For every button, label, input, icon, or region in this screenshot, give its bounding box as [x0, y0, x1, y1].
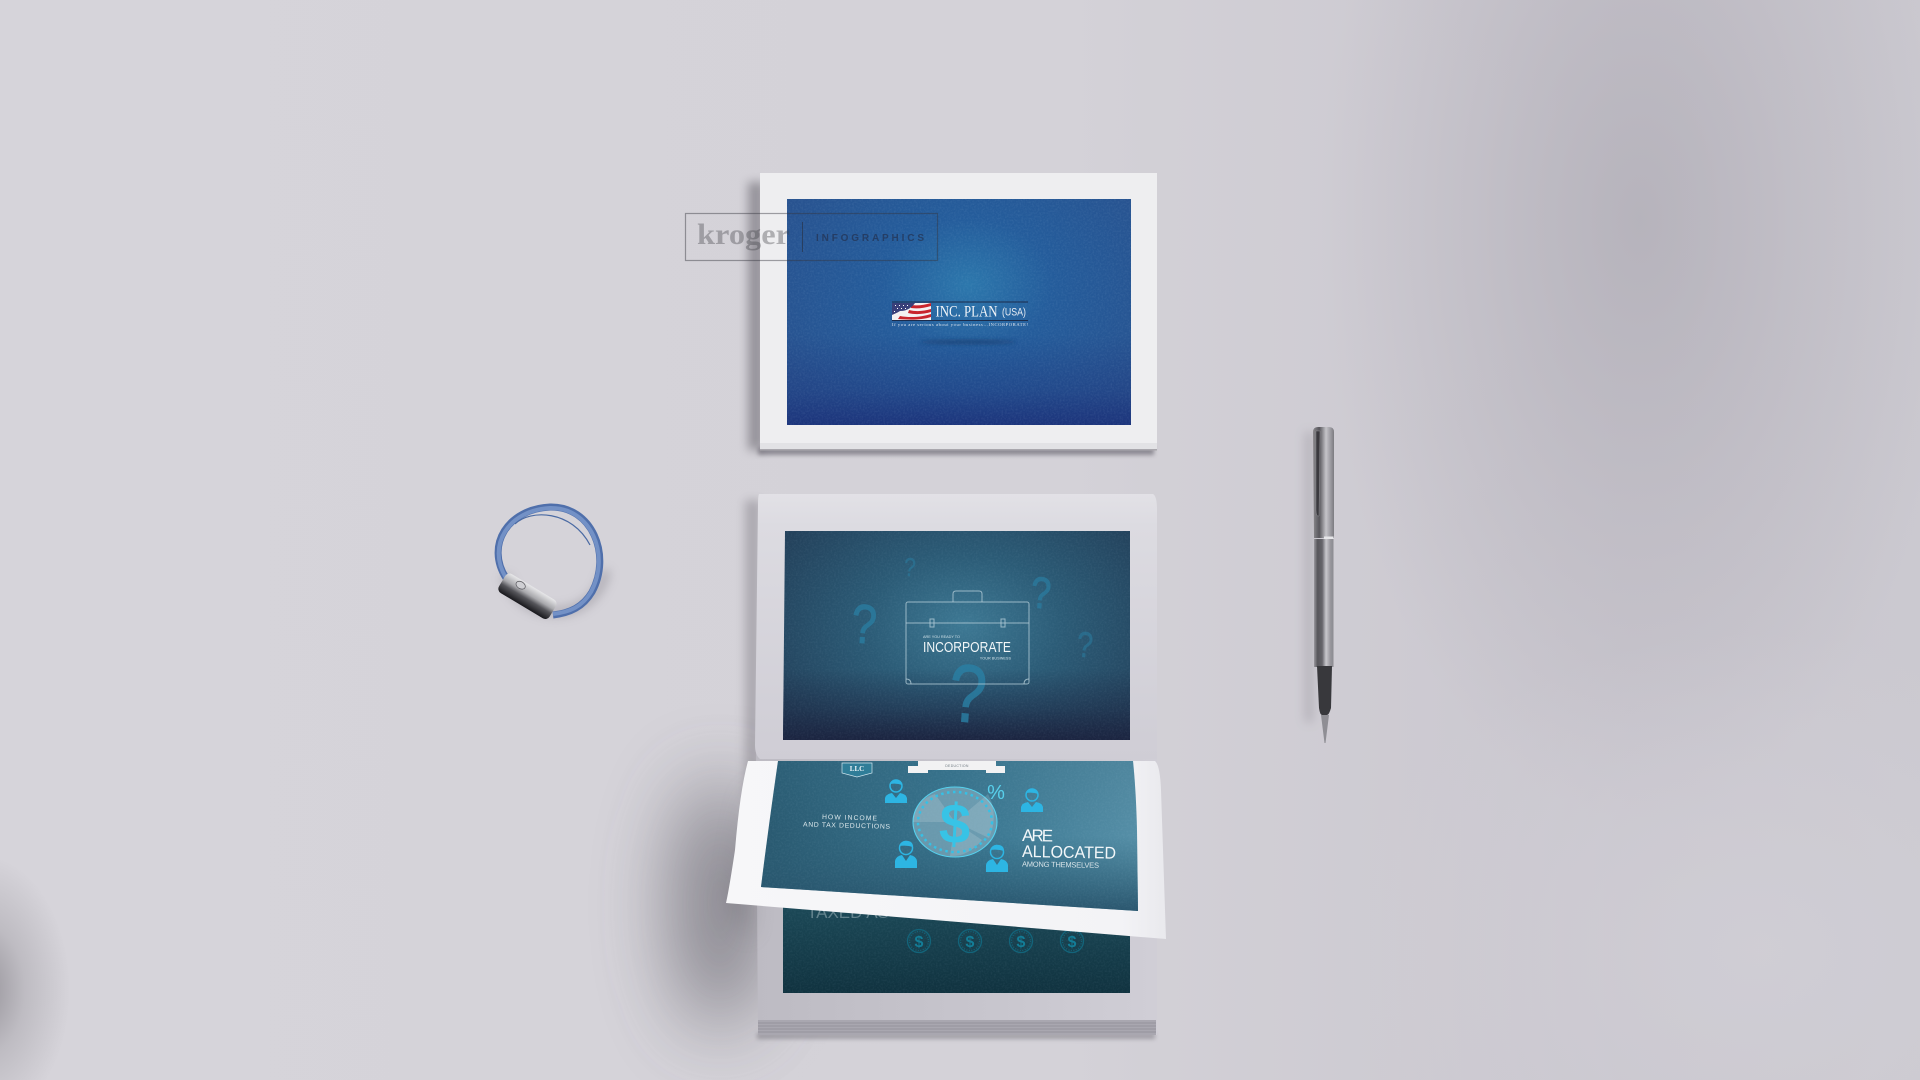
- question mark right: ?: [1076, 623, 1094, 666]
- icon: person top right: [1021, 789, 1043, 812]
- pen barrel: [1314, 539, 1334, 667]
- icon: coin 2: [958, 930, 982, 952]
- flipped teal panel: [761, 761, 1138, 911]
- watermark label: INFOGRAPHICS: [816, 233, 924, 244]
- watermark box: [686, 214, 938, 260]
- pen cap: [1313, 427, 1334, 538]
- icon: coin 1: $: [915, 934, 924, 951]
- LLC badge: LLC: [850, 765, 864, 773]
- dollar pie chart: [913, 787, 997, 857]
- question mark top: ?: [903, 552, 917, 582]
- cover drop shadow: [748, 182, 1154, 455]
- kicker: ARE YOU READY TO: [923, 635, 960, 639]
- icon: person bottom right: [986, 845, 1008, 872]
- icon: person top left: [885, 780, 907, 803]
- icon: coin 1: [908, 930, 930, 952]
- heading: how income: HOW INCOME: [822, 814, 878, 822]
- icon: coin 3: $: [1017, 934, 1026, 951]
- pie dot ring: [918, 792, 992, 852]
- cover spine edge: [760, 443, 1157, 450]
- watch crown: [515, 580, 527, 591]
- heading: are allocated: [1022, 826, 1116, 870]
- logo name: INC. PLAN: [936, 304, 998, 320]
- icon: American flag: [892, 303, 931, 320]
- pen grip: [1317, 666, 1332, 715]
- brochure open spread: [675, 494, 1157, 1039]
- logo tagline: If you are serious about your business…INCORPORATE!: [892, 322, 1028, 327]
- flipped page shadow: [728, 775, 750, 940]
- lower teal panel: [783, 908, 1130, 993]
- flipping page: [726, 761, 1166, 940]
- icon: person bottom left: [895, 841, 917, 868]
- pen: [1305, 427, 1334, 743]
- deduction ribbon: DEDUCTION: [945, 764, 969, 768]
- pen band: [1324, 536, 1334, 539]
- logo country: (USA): [1002, 306, 1026, 318]
- LLC badge: [842, 763, 872, 777]
- watermark logo: kroger: [697, 218, 790, 251]
- dollar sign: $: [938, 791, 972, 856]
- logo rules: [892, 302, 1028, 321]
- logo shadow: [920, 340, 1016, 344]
- main word: INCORPORATE: [923, 639, 1011, 656]
- heading: are allocated: ARE: [1022, 826, 1053, 846]
- heading: are allocated: AMONG THEMSELVES: [1022, 860, 1099, 870]
- pen clip: [1316, 431, 1320, 516]
- logo: Inc. Plan USA: [892, 302, 1028, 327]
- watch shadow: [505, 570, 606, 612]
- coins row: [908, 930, 1084, 952]
- cover blue panel: [787, 199, 1131, 425]
- icon: coin 2: $: [966, 934, 975, 951]
- spread drop shadow: [675, 500, 1155, 1039]
- question mark large: ?: [946, 646, 990, 741]
- brochure closed cover: [748, 173, 1157, 455]
- lower panel heading: TAXED AS: [807, 903, 889, 922]
- icon: coin 3: [1010, 930, 1032, 952]
- watch: [496, 507, 606, 621]
- pen shadow: [1305, 432, 1313, 722]
- person icons: [885, 780, 1043, 872]
- heading: are allocated: ALLOCATED: [1022, 842, 1116, 863]
- question marks: [849, 552, 1094, 741]
- flipped page paper: [726, 761, 1166, 939]
- pie highlight wedges: [913, 794, 994, 856]
- upper teal panel: [783, 531, 1130, 740]
- question mark upper right: ?: [1029, 568, 1053, 619]
- pen nib: [1321, 715, 1329, 743]
- icon: coin 4: $: [1068, 934, 1077, 951]
- lower page stack: [756, 750, 1157, 1035]
- briefcase title: [923, 635, 1011, 660]
- percent sign: %: [987, 782, 1005, 804]
- heading: how income: AND TAX DEDUCTIONS: [803, 822, 891, 831]
- icon: briefcase: [906, 591, 1029, 684]
- subline: YOUR BUSINESS: [980, 656, 1011, 660]
- upper page: [755, 494, 1157, 759]
- watch band: [498, 507, 600, 615]
- cover paper: [760, 173, 1157, 450]
- watch case: [496, 572, 558, 621]
- question mark left: ?: [849, 591, 879, 656]
- heading: how income: [803, 814, 891, 831]
- icon: coin 4: [1060, 930, 1084, 952]
- deduction ribbon: [908, 761, 1005, 773]
- watermark: kroger infographics: [686, 214, 938, 260]
- watermark divider: [802, 222, 803, 252]
